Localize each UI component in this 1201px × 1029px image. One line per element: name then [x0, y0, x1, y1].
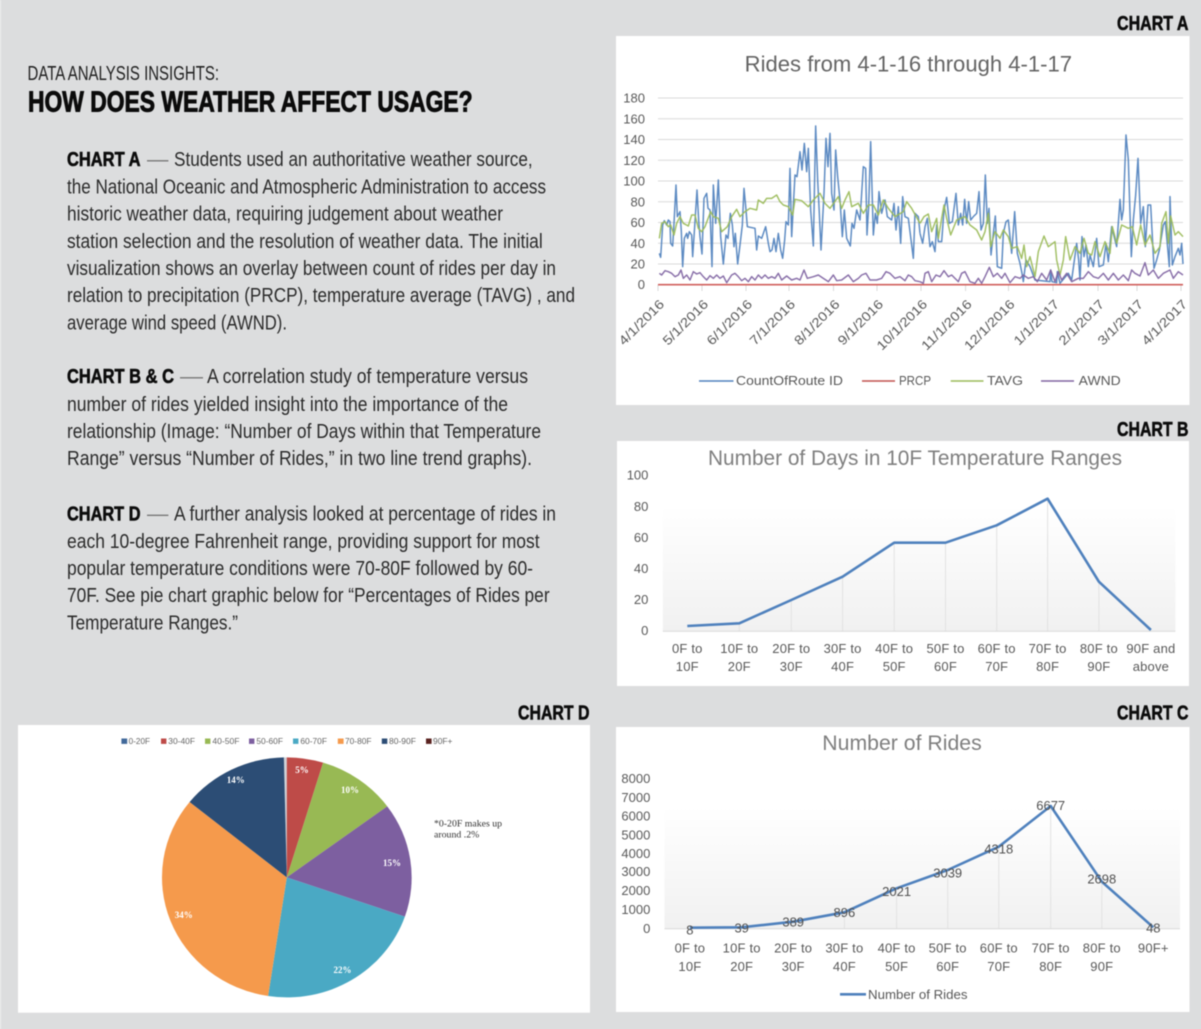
text block: chart B and C description: Range” versus “Number of Rides,” in two line trend graphs).: [67, 448, 532, 470]
chart B x axis labels: 10F: [676, 659, 699, 674]
chart C y axis labels: [621, 771, 650, 936]
chart A legend: [699, 373, 1121, 388]
chart A date axis labels: 9/1/2016: [835, 297, 886, 348]
chart B x axis labels: 30F: [780, 659, 803, 674]
chart C x axis labels: 90F+: [1138, 940, 1169, 955]
chart C x axis labels: 60F: [936, 959, 959, 974]
chart A date axis labels: 7/1/2016: [747, 297, 798, 348]
chart C x axis labels: 30F: [782, 959, 805, 974]
chart C y axis labels: 4000: [621, 846, 650, 861]
chart C x axis labels: 90F: [1090, 959, 1113, 974]
text block: chart A description: the National Oceanic and Atmospheric Administration to access: [67, 176, 546, 198]
chart C x axis labels: [675, 940, 1169, 974]
chart C x axis labels: 10F: [678, 959, 701, 974]
chart C x axis labels: 20F to: [774, 940, 812, 955]
chart C data labels: 389: [782, 914, 804, 930]
chart C x axis labels: 0F to: [675, 940, 705, 955]
chart A y axis labels: 120: [623, 153, 645, 168]
panel: chart A rides over time: [616, 36, 1190, 405]
pie percentage labels: 14%: [227, 775, 245, 785]
chart A y axis labels: 60: [631, 215, 645, 230]
chart A y axis labels: 0: [638, 277, 645, 292]
text block: chart A description: average wind speed (AWND).: [67, 312, 287, 334]
text block: chart D description: [67, 504, 556, 634]
text block: chart D description: A further analysis looked at percentage of rides in: [174, 504, 556, 526]
chart B x axis labels: 70F: [985, 659, 1008, 674]
pie legend: [121, 737, 453, 746]
chart A y axis labels: [623, 90, 645, 292]
panel: chart C number of rides: [616, 727, 1190, 1012]
chart B y axis labels: 40: [634, 561, 648, 576]
chart B x axis labels: 50F to: [926, 641, 965, 656]
label: chart D: CHART D: [518, 702, 590, 724]
chart C data labels: 2698: [1087, 872, 1116, 886]
chart C y axis labels: 8000: [621, 771, 650, 786]
chart A date axis labels: 2/1/2017: [1056, 297, 1107, 348]
chart C x axis labels: 10F to: [723, 940, 761, 955]
text block: chart D description: popular temperature conditions were 70-80F followed by 60-: [67, 558, 533, 580]
pie legend: 60-70F: [300, 737, 327, 746]
panel: chart B days in temperature ranges: [617, 441, 1189, 686]
chart B x axis labels: 50F: [883, 659, 906, 674]
chart A date axis labels: 3/1/2017: [1095, 297, 1146, 348]
chart A y axis labels: 40: [631, 236, 645, 251]
text block: chart B and C description: relationship (Image: “Number of Days within that Temperature: [67, 421, 541, 443]
chart A date axis labels: 10/1/2016: [874, 297, 930, 353]
chart C y axis labels: 1000: [621, 902, 650, 917]
chart C x axis labels: 40F to: [878, 940, 916, 955]
series: TAVG: [659, 192, 1183, 277]
chart B x axis labels: 30F to: [824, 641, 862, 656]
chart C x axis labels: 40F: [833, 959, 856, 974]
chart B y axis labels: 80: [634, 499, 648, 514]
chart B x axis labels: 10F to: [720, 641, 758, 656]
chart B x axis labels: 90F: [1087, 659, 1110, 674]
chart A y axis labels: 160: [623, 111, 645, 126]
eyebrow heading: DATA ANALYSIS INSIGHTS:: [28, 63, 219, 85]
pie percentage labels: [175, 765, 401, 975]
text block: chart B and C description: [67, 366, 541, 470]
chart B x axis labels: 80F to: [1080, 641, 1118, 656]
chart B x axis labels: above: [1133, 659, 1169, 674]
chart A date axis labels: 8/1/2016: [791, 297, 843, 348]
text block: chart A description: historic weather data, requiring judgement about weather: [67, 204, 503, 226]
chart C title: Number of Rides: [822, 732, 982, 755]
text block: chart A description: Students used an authoritative weather source,: [174, 149, 533, 171]
chart C y axis labels: 3000: [621, 864, 650, 879]
text block: chart A description: visualization shows an overlay between count of rides per day in: [67, 258, 556, 280]
chart C data labels: 8: [686, 922, 694, 938]
pie percentage labels: 15%: [383, 858, 401, 868]
text block: chart A description: —: [147, 149, 168, 171]
chart A y axis labels: 80: [631, 194, 645, 209]
chart B y axis labels: 20: [634, 592, 648, 607]
chart C data labels: 39: [734, 920, 749, 936]
chart A date axis labels: 4/1/2017: [1139, 297, 1190, 348]
chart A legend: PRCP: [899, 373, 931, 388]
text block: chart A description: CHART A: [67, 149, 140, 171]
chart B x axis labels: 40F to: [875, 641, 913, 656]
chart C y axis labels: 6000: [621, 808, 650, 824]
pie legend: 40-50F: [212, 737, 240, 746]
panel: chart D pie chart: [18, 725, 590, 1013]
chart C x axis labels: 80F: [1039, 959, 1062, 974]
chart A legend: TAVG: [987, 373, 1023, 388]
pie legend: 80-90F: [389, 737, 416, 746]
text block: chart A description: relation to precipitation (PRCP), temperature average (TAVG) , and: [67, 285, 575, 307]
chart B x axis labels: 90F and: [1126, 641, 1175, 656]
main title: HOW DOES WEATHER AFFECT USAGE?: [28, 87, 473, 119]
chart B y axis labels: 60: [634, 530, 648, 545]
chart A y axis labels: 140: [623, 132, 645, 147]
text block: chart B and C description: —: [180, 366, 203, 388]
pie legend: 50-60F: [256, 737, 283, 746]
pie legend: 90F+: [433, 737, 453, 746]
chart B x axis labels: 80F: [1036, 659, 1059, 674]
chart B y axis labels: [627, 468, 648, 638]
chart C x axis labels: 20F: [730, 959, 753, 974]
chart C x axis labels: 80F to: [1083, 940, 1121, 955]
pie percentage labels: 22%: [334, 965, 352, 975]
chart A date axis labels: 4/1/2016: [616, 297, 667, 348]
text block: chart D description: each 10-degree Fahrenheit range, providing support for most: [67, 531, 540, 553]
text block: chart A description: [67, 149, 575, 334]
chart B trend line: [687, 499, 1151, 630]
chart C data labels: 4318: [984, 842, 1013, 856]
pie slices: [162, 757, 412, 997]
chart B x axis labels: [672, 641, 1175, 674]
chart C data labels: 2021: [882, 884, 911, 899]
chart B x axis labels: 70F to: [1029, 641, 1067, 656]
text block: chart B and C description: CHART B & C: [67, 366, 174, 388]
pie percentage labels: 34%: [175, 910, 193, 920]
series: CountOfRoute ID: [659, 126, 1183, 283]
chart B x axis labels: 40F: [831, 659, 854, 674]
chart A title: Rides from 4-1-16 through 4-1-17: [745, 52, 1072, 77]
chart C y axis labels: 0: [643, 921, 650, 936]
chart A y axis labels: 100: [623, 174, 645, 188]
chart B title: Number of Days in 10F Temperature Ranges: [708, 447, 1122, 470]
text block: chart B and C description: A correlation study of temperature versus: [207, 366, 528, 388]
pie percentage labels: 5%: [295, 765, 309, 775]
chart B y axis labels: 0: [641, 623, 648, 638]
chart C x axis labels: 70F: [987, 959, 1010, 974]
chart C data labels: 3039: [933, 866, 962, 880]
chart A date axis labels: [616, 297, 1190, 353]
chart C x axis labels: 50F to: [929, 940, 967, 955]
chart B x axis labels: 60F: [934, 659, 957, 674]
chart C x axis labels: 50F: [885, 959, 908, 974]
chart C legend: Number of Rides: [868, 987, 968, 1002]
chart A date axis labels: 1/1/2017: [1011, 297, 1062, 348]
text block: chart D description: Temperature Ranges.”: [67, 612, 238, 634]
chart A y axis labels: 180: [623, 90, 645, 106]
text block: chart D description: CHART D: [67, 504, 140, 526]
text block: chart B and C description: number of rides yielded insight into the importance of the: [67, 394, 508, 416]
chart A date axis labels: 12/1/2016: [961, 297, 1018, 353]
chart C x axis labels: 60F to: [980, 940, 1018, 955]
pie legend: 70-80F: [345, 737, 372, 746]
chart A legend: AWND: [1079, 373, 1121, 388]
chart C y axis labels: 7000: [621, 790, 650, 805]
chart B x axis labels: 20F to: [772, 641, 810, 656]
series: AWND: [659, 263, 1183, 283]
text block: chart D description: —: [147, 504, 168, 526]
chart C y axis labels: 5000: [621, 828, 650, 842]
chart A date axis labels: 6/1/2016: [704, 297, 755, 348]
chart C data labels: 48: [1146, 920, 1161, 936]
chart A date axis labels: 5/1/2016: [660, 297, 711, 348]
chart C data labels: 6677: [1036, 798, 1065, 813]
pie legend: 0-20F: [129, 737, 150, 746]
chart C y axis labels: 2000: [621, 883, 650, 898]
chart A y axis labels: 20: [631, 256, 645, 272]
chart B x axis labels: 20F: [728, 659, 751, 674]
chart B x axis labels: 0F to: [672, 641, 703, 656]
chart A legend: CountOfRoute ID: [736, 373, 843, 388]
chart B y axis labels: 100: [627, 468, 648, 482]
chart C x axis labels: 30F to: [825, 940, 863, 955]
pie percentage labels: 10%: [341, 785, 359, 795]
text block: chart D description: 70F. See pie chart graphic below for “Percentages of Rides per: [67, 585, 550, 607]
chart C x axis labels: 70F to: [1032, 940, 1070, 955]
pie footnote: *0-20F makes up: [434, 820, 502, 830]
chart A date axis labels: 11/1/2016: [918, 297, 975, 353]
chart B x axis labels: 60F to: [978, 641, 1016, 656]
text block: chart A description: station selection and the resolution of weather data. The initial: [67, 231, 543, 253]
pie legend: 30-40F: [168, 737, 195, 746]
chart C data labels: [686, 798, 1161, 938]
chart C trend line: [690, 806, 1153, 928]
pie footnote: [434, 820, 502, 841]
chart C data labels: 896: [834, 905, 855, 920]
pie footnote: around .2%: [434, 831, 479, 841]
series: PRCP: [658, 284, 1183, 286]
